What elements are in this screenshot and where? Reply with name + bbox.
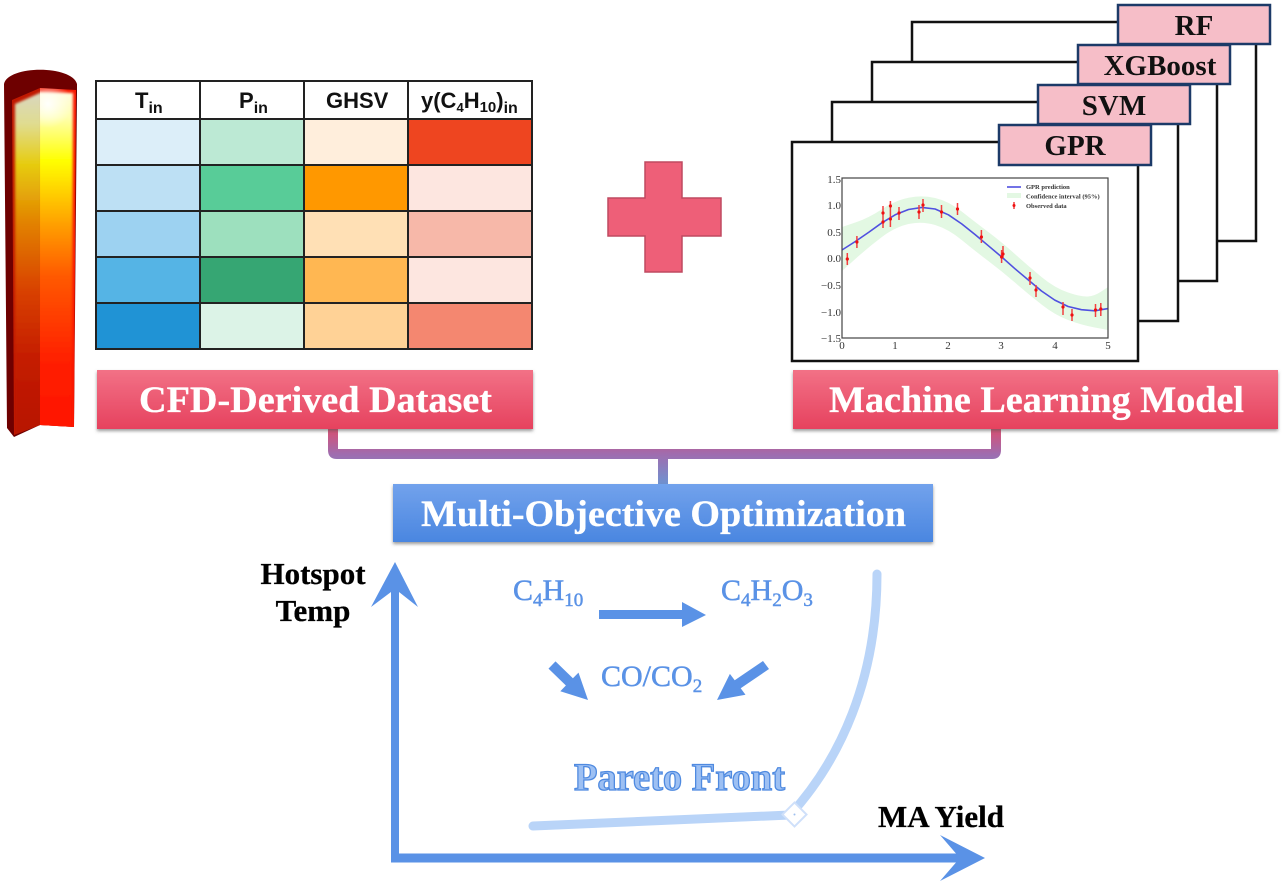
model cards stack xyxy=(792,5,1270,361)
table headers: T xyxy=(135,88,148,113)
by-product: carbon oxides: CO/CO xyxy=(601,660,693,693)
card: SVM xyxy=(832,85,1190,321)
by-product: carbon oxides: 2 xyxy=(693,676,702,697)
confidence band xyxy=(842,196,1108,330)
y axis ticks: 0.5 xyxy=(827,227,842,239)
product: maleic anhydride: 2 xyxy=(772,590,782,611)
button: CFD-Derived Dataset: CFD-Derived Dataset xyxy=(139,380,493,421)
chart legend: Confidence interval (95%) xyxy=(1026,194,1100,200)
x axis ticks: 2 xyxy=(945,340,951,352)
y axis ticks: −0.5 xyxy=(821,280,841,292)
arrow: product to carbon oxides xyxy=(717,661,769,700)
y axis label: Hotspot xyxy=(260,556,366,591)
prediction line xyxy=(842,207,1108,311)
arrow: butane to carbon oxides xyxy=(548,661,588,700)
reactant: butane: 10 xyxy=(564,590,583,611)
table headers: in xyxy=(504,100,518,117)
table headers: y(C xyxy=(421,88,456,113)
pareto front label: Pareto Front xyxy=(574,756,785,799)
product: maleic anhydride: H xyxy=(751,574,772,607)
x axis arrow xyxy=(391,835,985,881)
chart legend: Observed data xyxy=(1026,203,1067,210)
table headers: in xyxy=(254,100,268,117)
observed points xyxy=(846,199,1102,321)
plot frame xyxy=(842,178,1108,338)
y axis ticks: 0.0 xyxy=(827,253,842,265)
arrow: butane to product xyxy=(599,602,706,627)
table headers: P xyxy=(239,88,254,113)
table headers: in xyxy=(148,100,163,117)
x axis ticks: 1 xyxy=(892,340,898,352)
chart legend xyxy=(1007,184,1100,210)
plus sign xyxy=(608,162,721,272)
y axis ticks: 1.0 xyxy=(827,200,842,212)
reactant: butane: H xyxy=(543,574,564,607)
table headers: H xyxy=(464,88,480,113)
x axis ticks: 0 xyxy=(839,340,845,352)
chart legend: GPR prediction xyxy=(1026,184,1070,191)
product: maleic anhydride: 3 xyxy=(803,590,813,611)
table headers xyxy=(135,88,518,117)
button: Multi-Objective Optimization: Multi-Objective Optimization xyxy=(421,494,906,535)
y axis ticks: −1.0 xyxy=(821,307,841,319)
button: Multi-Objective Optimization xyxy=(393,484,933,542)
card: XGBoost: XGBoost xyxy=(1104,50,1217,82)
x axis ticks: 3 xyxy=(998,340,1004,352)
y axis ticks: −1.5 xyxy=(821,333,841,345)
table headers: ) xyxy=(496,88,504,113)
table headers: 4 xyxy=(456,100,464,115)
data table xyxy=(96,81,532,349)
product: maleic anhydride: C xyxy=(721,574,741,607)
y axis ticks: 1.5 xyxy=(827,174,842,186)
GPR chart xyxy=(821,174,1111,352)
front card: GPR: GPR xyxy=(1044,130,1107,162)
table headers: 10 xyxy=(480,99,496,116)
table cells xyxy=(96,119,532,349)
pareto front curve xyxy=(533,574,877,826)
card: XGBoost xyxy=(872,45,1230,281)
reactor tube xyxy=(4,70,77,437)
button: CFD-Derived Dataset xyxy=(97,370,533,429)
front card: GPR xyxy=(792,125,1151,361)
x axis ticks xyxy=(839,340,1111,352)
back card: RF xyxy=(912,5,1270,241)
back card: RF: RF xyxy=(1175,10,1213,42)
card: SVM: SVM xyxy=(1082,90,1146,122)
table headers: GHSV xyxy=(326,88,389,113)
x axis ticks: 5 xyxy=(1105,340,1111,352)
y axis arrow xyxy=(371,562,418,854)
product: maleic anhydride: 4 xyxy=(741,590,751,611)
reactant: butane: C xyxy=(513,574,533,607)
y axis ticks xyxy=(821,174,842,345)
optimal point marker xyxy=(782,802,807,827)
button: Machine Learning Model: Machine Learning Model xyxy=(829,380,1244,421)
x axis ticks: 4 xyxy=(1052,340,1058,352)
reactant: butane: 4 xyxy=(533,590,543,611)
button: Machine Learning Model xyxy=(793,370,1278,429)
y axis label: Temp xyxy=(276,593,350,628)
product: maleic anhydride: O xyxy=(782,574,803,607)
y axis label xyxy=(260,556,366,628)
connector bracket xyxy=(328,429,1001,484)
x axis label: MA Yield xyxy=(878,799,1004,834)
